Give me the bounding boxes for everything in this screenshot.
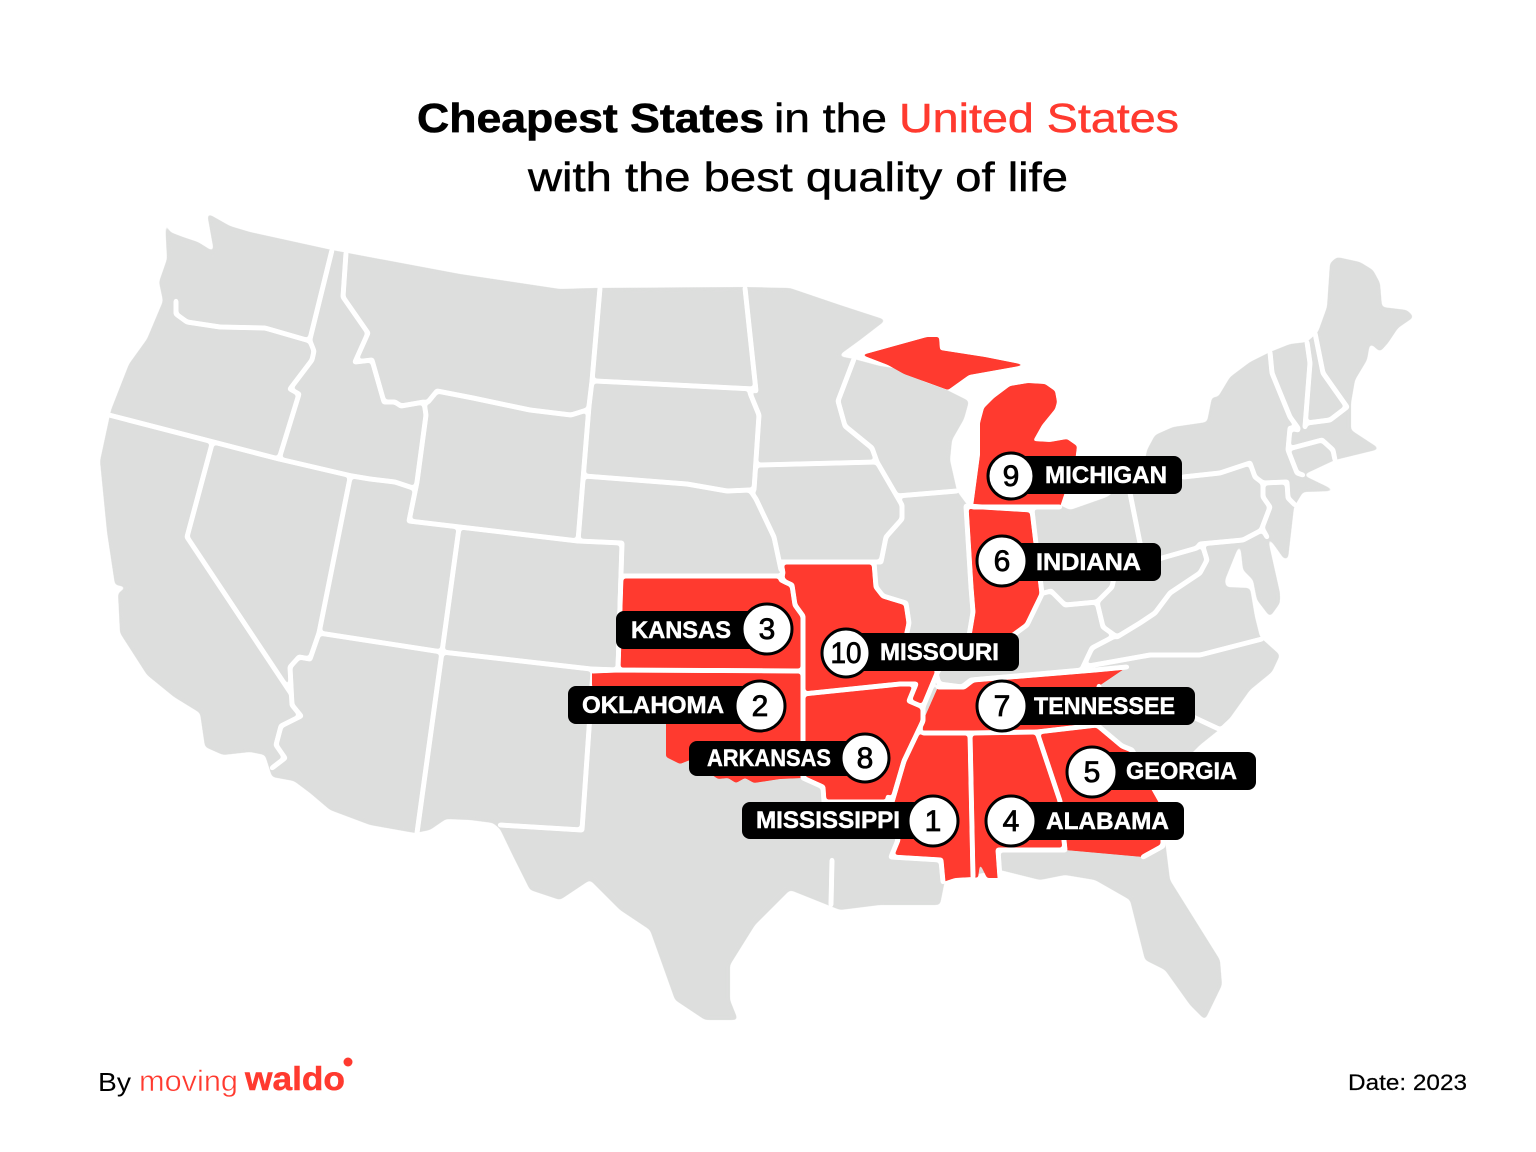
logo: By moving waldo: moving xyxy=(139,1065,238,1098)
highlighted state: Mississippi xyxy=(888,733,973,882)
highlighted state: Georgia xyxy=(1037,725,1163,857)
label: rank 10 Missouri: 10 xyxy=(830,637,862,670)
label: rank 2 Oklahoma: 2 xyxy=(752,690,768,723)
title: with the best quality of life xyxy=(527,154,1068,200)
label: rank 3 Kansas xyxy=(616,604,792,654)
date: Date: 2023 xyxy=(1348,1070,1467,1095)
highlighted state: Michigan lower peninsula xyxy=(973,383,1077,507)
state border lines xyxy=(109,250,1347,905)
label: rank 9 Michigan: 9 xyxy=(1003,460,1019,493)
label: rank 7 Tennessee: TENNESSEE xyxy=(1034,693,1175,720)
title xyxy=(417,95,1179,200)
label: rank 4 Alabama: 4 xyxy=(1003,805,1019,838)
label: rank 1 Mississippi: 1 xyxy=(925,805,941,838)
label: rank 4 Alabama xyxy=(986,796,1184,846)
logo: By moving waldo: waldo xyxy=(244,1060,345,1097)
highlighted state: Indiana xyxy=(966,506,1042,636)
label: rank 7 Tennessee: 7 xyxy=(994,690,1010,723)
label: rank 6 Indiana xyxy=(977,536,1161,586)
highlighted state: Missouri xyxy=(781,562,938,707)
label: rank 8 Arkansas: ARKANSAS xyxy=(707,745,831,772)
label: rank 1 Mississippi xyxy=(742,796,958,846)
label: rank 7 Tennessee xyxy=(977,681,1195,731)
label: rank 8 Arkansas: 8 xyxy=(857,742,873,775)
highlighted state: Arkansas xyxy=(803,684,923,802)
highlighted state: Alabama xyxy=(970,732,1065,878)
label: rank 9 Michigan xyxy=(988,453,1182,499)
label: rank 9 Michigan: MICHIGAN xyxy=(1045,462,1167,489)
label: rank 8 Arkansas xyxy=(689,734,889,782)
label: rank 3 Kansas: KANSAS xyxy=(631,617,731,644)
highlighted states: red fills xyxy=(592,337,1163,882)
label: rank 5 Georgia: GEORGIA xyxy=(1126,758,1237,785)
borders between highlighted states xyxy=(592,506,1163,882)
highlighted state: Kansas xyxy=(618,576,803,670)
label: rank 3 Kansas: 3 xyxy=(759,613,775,646)
logo: By moving waldo: By xyxy=(98,1067,131,1097)
label: rank 6 Indiana: 6 xyxy=(994,545,1010,578)
map base: contiguous states silhouette xyxy=(100,213,1414,1020)
title: Cheapest States xyxy=(417,95,764,141)
label: rank 2 Oklahoma: OKLAHOMA xyxy=(582,692,724,719)
highlighted state: Oklahoma xyxy=(592,671,803,783)
logo: By moving waldo xyxy=(98,1058,352,1098)
label: rank 5 Georgia: 5 xyxy=(1084,756,1100,789)
label: rank 5 Georgia xyxy=(1067,747,1256,797)
map of the United States xyxy=(100,213,1414,1020)
label: rank 6 Indiana: INDIANA xyxy=(1036,549,1141,576)
label: rank 4 Alabama: ALABAMA xyxy=(1046,808,1169,835)
label: rank 10 Missouri: MISSOURI xyxy=(880,639,999,666)
label: rank 10 Missouri xyxy=(822,629,1019,677)
highlighted state: Michigan upper peninsula xyxy=(862,337,1025,390)
highlighted state: Tennessee xyxy=(923,667,1127,733)
title: United States xyxy=(899,95,1179,141)
label: rank 1 Mississippi: MISSISSIPPI xyxy=(756,807,900,834)
label: rank 2 Oklahoma xyxy=(568,681,785,731)
title: in the xyxy=(774,95,887,141)
